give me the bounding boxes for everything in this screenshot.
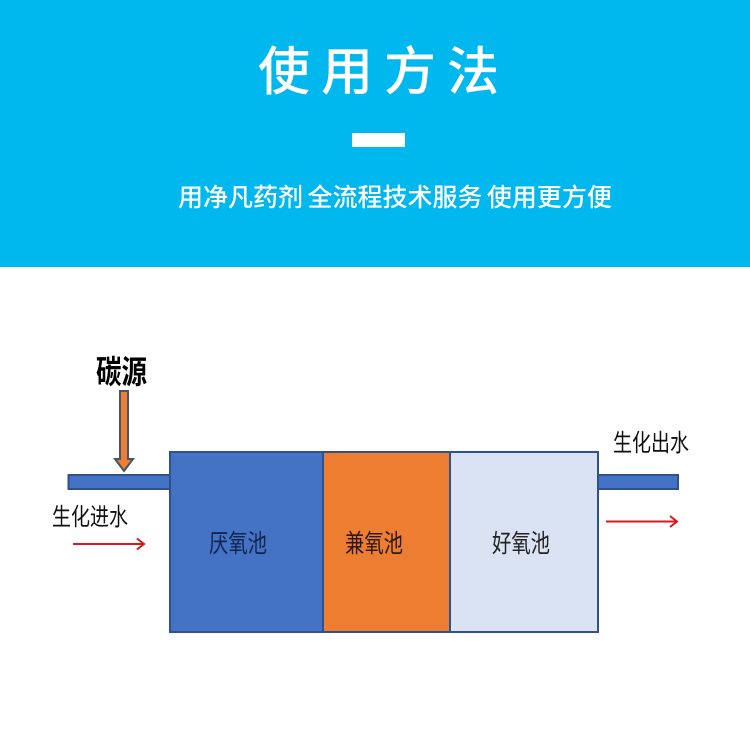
outlet pipe bbox=[597, 475, 678, 489]
outlet water label: 生化出水 bbox=[613, 430, 689, 457]
process diagram bbox=[52, 354, 689, 633]
carbon source arrow bbox=[115, 391, 133, 471]
title divider bar bbox=[352, 133, 405, 147]
title: 使用方法 bbox=[258, 44, 510, 102]
anoxic tank bbox=[323, 452, 450, 632]
anoxic tank: 兼氧池 bbox=[345, 530, 403, 558]
carbon source label: 碳源 bbox=[96, 354, 147, 390]
anaerobic tank: 厌氧池 bbox=[209, 530, 267, 558]
inlet pipe bbox=[68, 475, 170, 489]
inlet water label: 生化进水 bbox=[52, 504, 128, 531]
outlet flow arrow bbox=[606, 516, 677, 527]
inlet flow arrow bbox=[73, 538, 144, 550]
subtitle: 用净凡药剂 全流程技术服务 使用更方便 bbox=[178, 184, 612, 212]
aerobic tank bbox=[450, 452, 598, 632]
header banner bbox=[0, 0, 750, 267]
anaerobic tank bbox=[170, 452, 323, 632]
aerobic tank: 好氧池 bbox=[492, 530, 550, 558]
